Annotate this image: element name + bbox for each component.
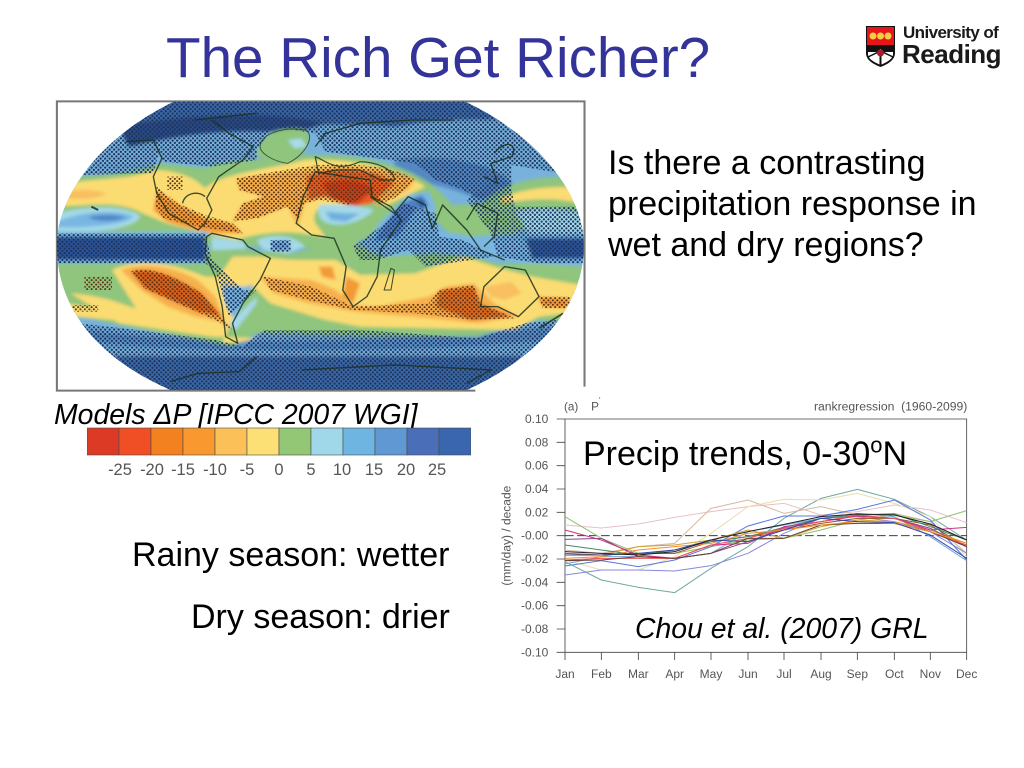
x axis labels: Jun [738, 667, 758, 681]
y axis labels: -0.04 [521, 575, 549, 589]
yellow south [71, 257, 591, 343]
colour legend: 20 [397, 461, 415, 479]
y axis labels: -0.08 [521, 622, 549, 636]
colour legend: -25 [108, 461, 132, 479]
map: precipitation change [56, 100, 586, 392]
chart annotation: Precip trends, 0-30oN [583, 433, 907, 473]
question text [608, 144, 977, 264]
y axis labels: -0.02 [521, 552, 549, 566]
logo: University of Reading: University of [903, 23, 998, 42]
chart header left: ' [599, 396, 601, 405]
y axis labels: 0.06 [525, 459, 549, 473]
x axis labels [555, 667, 977, 681]
question text: wet and dry regions? [608, 226, 924, 264]
chart citation: Chou et al. (2007) GRL [635, 613, 929, 645]
x axis labels: Jan [555, 667, 575, 681]
y axis labels [521, 412, 549, 659]
orange south [121, 266, 233, 330]
x axis labels: Dec [956, 667, 977, 681]
colour legend: 5 [306, 461, 316, 479]
colour legend: 15 [365, 461, 383, 479]
x axis labels: Nov [920, 667, 941, 681]
green south band [50, 238, 591, 347]
model lines [565, 489, 967, 593]
zero line [565, 534, 967, 537]
stippling [50, 97, 591, 400]
yellow north [57, 160, 425, 240]
colour legend: 10 [333, 461, 351, 479]
y axis labels: 0.08 [525, 435, 549, 449]
green north band [50, 155, 591, 250]
orange north [153, 190, 243, 233]
equatorial blue [50, 237, 205, 262]
x axis labels: Feb [591, 667, 612, 681]
x axis labels: Apr [665, 667, 684, 681]
x axis labels: Oct [885, 667, 904, 681]
y axis labels: 0.10 [525, 412, 549, 426]
y axis labels: -0.06 [521, 599, 549, 613]
rainy season text: Rainy season: wetter [132, 536, 450, 574]
colour legend [87, 428, 471, 479]
map frame [57, 101, 585, 391]
dry season text: Dry season: drier [191, 598, 450, 636]
question text: precipitation response in [608, 185, 977, 223]
x axis labels: Mar [628, 667, 649, 681]
question text: Is there a contrasting [608, 144, 926, 182]
x axis labels: Jul [776, 667, 792, 681]
logo: University of Reading: Reading [902, 39, 1001, 69]
colour legend: 25 [428, 461, 446, 479]
x axis labels: Aug [810, 667, 832, 681]
y axis title: (mm/day) / decade [500, 485, 514, 586]
chart header left: (a) P [564, 400, 599, 413]
y axis labels: -0.10 [521, 645, 549, 659]
colour legend: 0 [274, 461, 284, 479]
coastlines [91, 113, 563, 383]
x axis labels: Sep [847, 667, 868, 681]
light blue/tropics [50, 207, 140, 232]
chart header right: rankregression (1960-2099) [814, 399, 967, 413]
y axis labels: 0.04 [525, 482, 549, 496]
x axis labels: May [700, 667, 722, 681]
blue sahara and Arabian sea [318, 204, 374, 225]
y axis labels: -0.00 [521, 529, 549, 543]
colour legend: -15 [171, 461, 195, 479]
title: The Rich Get Richer? [166, 26, 710, 89]
colour legend: -20 [140, 461, 164, 479]
y axis labels: 0.02 [525, 505, 549, 519]
map caption: Models ΔP [IPCC 2007 WGI] [54, 399, 418, 431]
chart axes [557, 419, 967, 660]
colour legend: -5 [240, 461, 254, 479]
colour legend: -10 [203, 461, 227, 479]
logo: University of Reading [866, 23, 1001, 69]
